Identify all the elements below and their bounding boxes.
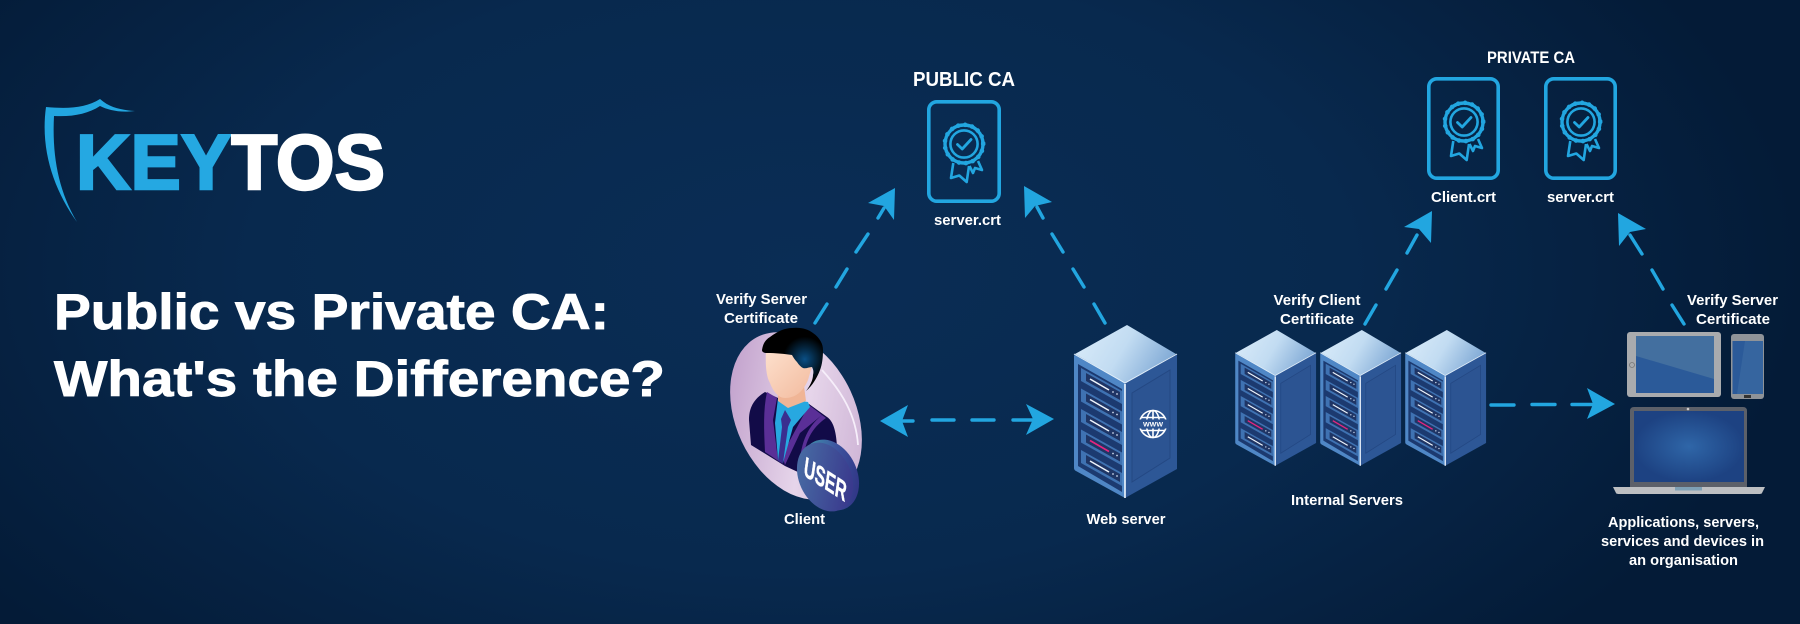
label: verify client certificate: Certificate [1280,311,1354,328]
icon: USER badge: USER [802,450,849,508]
logo: Keytos shield and wordmark [45,99,385,222]
arrow: web server to public CA [1024,186,1105,323]
icon: phone [1731,334,1764,399]
label: verify server certificate (client) [716,291,807,327]
label: verify server certificate (client): Verify Server [716,291,807,308]
icon: client certificate [1429,79,1498,178]
icon: tablet [1627,332,1721,397]
suit [749,392,837,473]
icon: www globe: WWW [1143,421,1164,428]
label: server.crt: server.crt [934,212,1001,229]
label: verify server certificate (devices): Verify Server [1687,292,1778,309]
arrow: client to web server, two-way [880,404,1054,437]
icon: public CA certificate [929,102,999,201]
title: What's the Difference? [54,351,665,407]
label: web server: Web server [1086,511,1166,528]
icon: server certificate [1546,79,1615,178]
label: verify server certificate (devices) [1687,292,1778,328]
label: applications, servers, services and devices: an organisation [1629,552,1738,569]
arrow: internal servers to devices [1491,388,1615,419]
title [54,284,665,407]
icon: shield outline [45,99,135,222]
title: Public vs Private CA: [54,284,609,340]
icon: web server rack [1074,325,1177,498]
label: verify server certificate (devices): Certificate [1696,311,1770,328]
label: applications, servers, services and devices: services and devices in [1601,533,1764,550]
label: internal servers: Internal Servers [1291,492,1403,509]
panel: public CA [913,69,1015,229]
label: applications, servers, services and devices: Applications, servers, [1608,514,1759,531]
label: verify server certificate (client): Certificate [724,310,798,327]
wordmark: KEYTOS [76,118,385,206]
icon: client user [704,311,888,521]
icon: laptop [1613,407,1765,494]
icon: devices [1613,332,1765,494]
heading: private CA: PRIVATE CA [1487,49,1575,67]
icon: www globe [1138,410,1168,438]
label: verify client certificate [1274,292,1360,328]
arrow: internal servers to client certificate [1365,211,1432,324]
label: server.crt: server.crt [1547,189,1614,206]
heading: public CA: PUBLIC CA [913,69,1015,91]
label: Client.crt: Client.crt [1431,189,1496,206]
arrow: client to public CA [815,188,895,323]
panel: private CA [1429,49,1615,206]
arrow: devices to server certificate [1618,213,1684,324]
label: verify client certificate: Verify Client [1274,292,1360,309]
label: applications, servers, services and devices [1601,514,1764,569]
icon: USER badge [786,430,870,521]
icon: internal server racks [1235,330,1486,466]
label: client: Client [784,511,825,528]
